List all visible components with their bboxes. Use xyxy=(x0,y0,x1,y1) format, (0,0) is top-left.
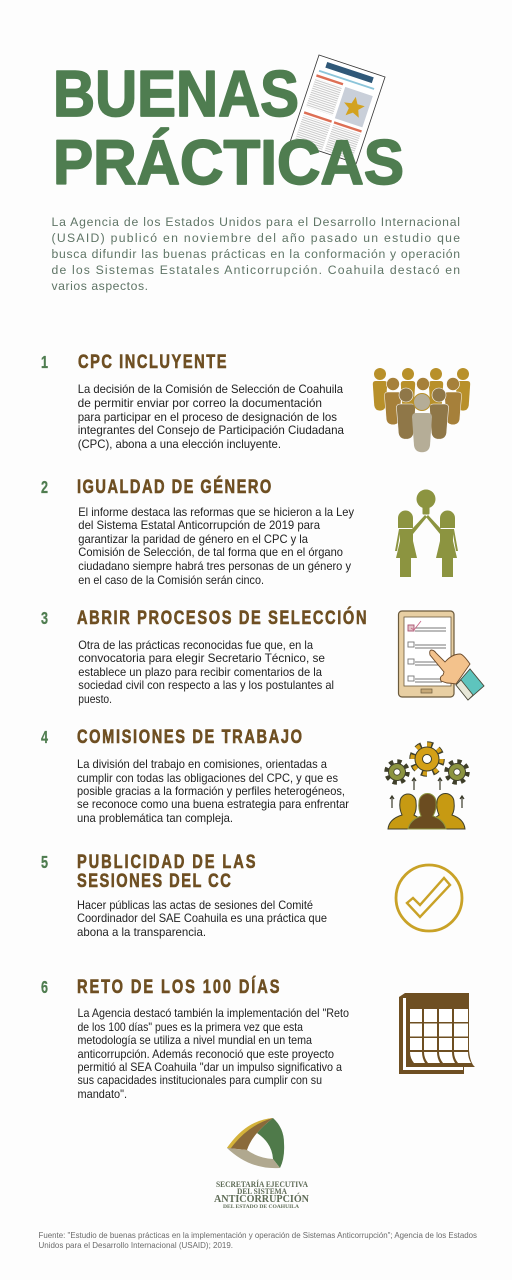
body text 6: sus capacidades institucionales para cumplir con su xyxy=(78,1073,322,1087)
heading: publicidad de las sesiones: PUBLICIDAD DE LAS xyxy=(77,850,256,873)
number 1: 1 xyxy=(41,353,48,373)
body text 6: anticorrupción. Además reconoció que este proyecto xyxy=(78,1047,334,1061)
body text 3 xyxy=(78,638,334,706)
body text 1: para participar en el proceso de designación de los xyxy=(78,410,337,424)
logo mark xyxy=(227,1118,284,1168)
panel: section 2 xyxy=(41,475,458,587)
body text 2: ciudadano siempre habrá tres personas de un género y xyxy=(78,559,351,573)
body text 2: garantizar la paridad de género en el CPC y la xyxy=(78,532,308,546)
intro text xyxy=(52,215,460,293)
body text 6: permitió al SEA Coahuila "dar un impulso significativo a xyxy=(78,1060,342,1074)
source footnote xyxy=(38,1231,477,1250)
logo text xyxy=(214,1179,309,1210)
body text 1: de permitir enviar por correo la documentación xyxy=(78,396,322,410)
panel: section 3 xyxy=(41,606,484,706)
intro text: de los Sistemas Estatales Anticorrupción. Coahuila destacó en xyxy=(52,263,460,277)
body text 4: La división del trabajo en comisiones, orientadas a xyxy=(77,757,327,771)
body text 1: (CPC), abona a una elección incluyente. xyxy=(78,437,281,451)
heading: CPC incluyente: CPC INCLUYENTE xyxy=(78,350,226,373)
logo text: SECRETARÍA EJECUTIVA xyxy=(216,1179,308,1189)
body text 3: establece un plazo para recibir comentarios de la xyxy=(78,665,322,679)
panel: section 6 xyxy=(41,975,475,1101)
icon: calendar xyxy=(399,993,475,1074)
body text 4: cumplir con todas las obligaciones del CPC, y que es xyxy=(77,771,338,785)
icon: newspaper xyxy=(290,55,385,163)
body text 3: puesto. xyxy=(78,692,112,706)
icon: tablet with checklist and hand xyxy=(398,611,484,700)
heading: abrir procesos de seleccion: ABRIR PROCESOS DE SELECCIÓN xyxy=(77,606,366,629)
icon: two women holding a light bulb xyxy=(395,490,458,577)
body text 1 xyxy=(78,382,344,451)
heading: comisiones de trabajo: COMISIONES DE TRABAJO xyxy=(77,725,302,748)
source footnote: Fuente: "Estudio de buenas prácticas en la implementación y operación de Sistemas Anticorrupción"; Agencia de los Estados xyxy=(38,1231,477,1240)
icon: check mark in circle xyxy=(396,865,462,931)
body text 2 xyxy=(78,505,354,587)
body text 2: del Sistema Estatal Anticorrupción de 2019 para xyxy=(78,518,320,532)
title: BUENAS xyxy=(53,57,299,130)
body text 5: Hacer públicas las actas de sesiones del Comité xyxy=(77,898,313,912)
logo: Secretaría Ejecutiva xyxy=(214,1118,309,1210)
body text 6: de los 100 días" pues es la primera vez que esta xyxy=(78,1020,303,1034)
title xyxy=(53,57,404,198)
icon: group of people xyxy=(373,368,470,452)
number 6: 6 xyxy=(41,978,48,998)
body text 6: metodología se utiliza a nivel mundial en un tema xyxy=(78,1033,312,1047)
body text 2: en el caso de la Comisión serán cinco. xyxy=(78,573,264,587)
body text 2: El informe destaca las reformas que se hicieron a la Ley xyxy=(78,505,354,519)
logo text: DEL ESTADO DE COAHUILA xyxy=(223,1204,299,1210)
body text 4 xyxy=(77,757,349,825)
intro text: busca difundir las buenas prácticas en la conformación y operación xyxy=(52,247,460,261)
heading: publicidad de las sesiones xyxy=(77,850,256,892)
heading: publicidad de las sesiones: SESIONES DEL CC xyxy=(77,869,231,892)
number 3: 3 xyxy=(41,609,48,629)
body text 5 xyxy=(77,898,327,939)
logo text: DEL SISTEMA xyxy=(237,1187,287,1196)
panel: section 1 xyxy=(41,350,470,452)
intro text: varios aspectos. xyxy=(52,279,148,293)
body text 1: integrantes del Consejo de Participación Ciudadana xyxy=(78,423,344,437)
body text 3: Otra de las prácticas reconocidas fue que, en la xyxy=(78,638,313,652)
body text 3: convocatoria para elegir Secretario Técnico, se xyxy=(78,651,325,665)
heading: igualdad de genero: IGUALDAD DE GÉNERO xyxy=(77,475,271,498)
body text 2: Comisión de Selección, de tal forma que en el órgano xyxy=(78,545,343,559)
source footnote: Unidos para el Desarrollo Internacional (USAID); 2019. xyxy=(38,1241,233,1250)
body text 6: mandato". xyxy=(78,1087,127,1101)
intro text: La Agencia de los Estados Unidos para el Desarrollo Internacional xyxy=(52,215,460,229)
body text 4: se reconoce como una buena estrategia para enfrentar xyxy=(77,797,349,811)
heading: reto de los 100 dias: RETO DE LOS 100 DÍAS xyxy=(77,975,280,998)
panel: section 4 xyxy=(41,725,467,829)
intro text: (USAID) publicó en noviembre del año pasado un estudio que xyxy=(52,231,460,245)
body text 6 xyxy=(78,1006,349,1101)
logo text: ANTICORRUPCIÓN xyxy=(214,1193,309,1205)
number 2: 2 xyxy=(41,478,48,498)
body text 4: posible gracias a la formación y perfiles heterogéneos, xyxy=(77,784,345,798)
panel: section 5 xyxy=(41,850,462,939)
body text 6: La Agencia destacó también la implementación del "Reto xyxy=(78,1006,349,1020)
number 5: 5 xyxy=(41,853,48,873)
body text 5: abona a la transparencia. xyxy=(77,925,206,939)
body text 1: La decisión de la Comisión de Selección de Coahuila xyxy=(78,382,343,396)
body text 3: sociedad civil con respecto a las y los postulantes al xyxy=(78,678,334,692)
number 4: 4 xyxy=(41,728,48,748)
body text 5: Coordinador del SAE Coahuila es una práctica que xyxy=(77,911,327,925)
icon: gears over team xyxy=(387,745,467,829)
body text 4: una problemática tan compleja. xyxy=(77,811,233,825)
title: PRÁCTICAS xyxy=(53,128,404,198)
